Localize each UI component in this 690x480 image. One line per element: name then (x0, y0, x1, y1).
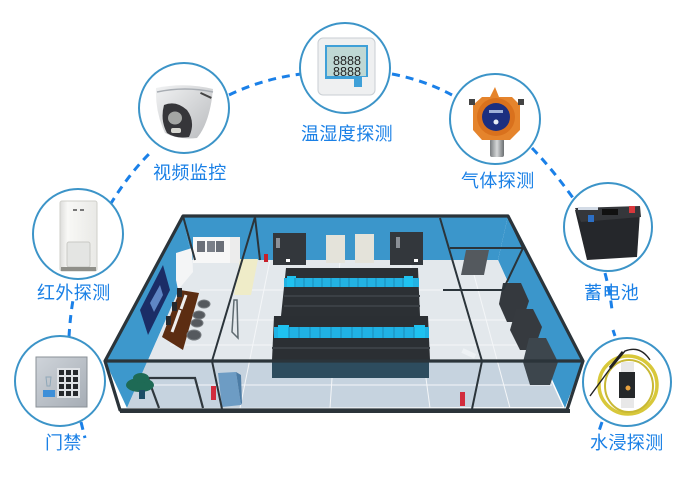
icon: dome camera (156, 85, 213, 138)
label: temperature humidity detection: 温湿度探测 (301, 124, 393, 144)
gas detection node (450, 74, 540, 191)
label: infrared detection: 红外探测 (37, 283, 111, 303)
wall screen (140, 265, 170, 335)
fire extinguishers front (211, 386, 465, 406)
back white cabinets (326, 234, 374, 263)
label: video surveillance: 视频监控 (153, 163, 227, 183)
room frame (105, 216, 583, 411)
label: water leak detection: 水浸探测 (590, 433, 664, 453)
icon: temperature humidity meter: 8888 (333, 64, 361, 79)
label: door access: 门禁 (45, 433, 82, 453)
icon: water leak sensor (590, 349, 657, 414)
brown console desk (162, 288, 199, 350)
entrance door (148, 378, 203, 408)
icon: battery (575, 206, 641, 260)
battery node (564, 183, 652, 303)
door access node (15, 336, 105, 453)
icon: infrared sensor (60, 201, 97, 271)
potted plant (126, 373, 154, 399)
server rack row 1 (281, 268, 420, 316)
label: gas detection: 气体探测 (461, 171, 535, 191)
icon: door keypad (36, 357, 87, 407)
white display cabinets (193, 237, 240, 263)
icon: gas detector (469, 87, 524, 157)
icon: temperature humidity meter: 8888 (333, 53, 361, 68)
water leak node (583, 338, 671, 453)
label: battery: 蓄电池 (584, 283, 639, 303)
beige cabinet (234, 259, 258, 295)
back wall (183, 216, 508, 260)
white indicator (461, 348, 476, 359)
white side rack (176, 248, 193, 290)
fire extinguisher back (264, 254, 268, 262)
infrared node (33, 189, 123, 303)
left wall (105, 216, 192, 408)
back dark cabinet right (390, 232, 423, 265)
rear gray cabinet (461, 250, 489, 275)
temperature and humidity node (300, 23, 393, 144)
floor (127, 260, 563, 408)
server room 3D floor plan (105, 216, 583, 411)
blue cabinet (218, 372, 242, 407)
connecting dashed arc (69, 74, 615, 438)
office chairs (187, 300, 210, 340)
dark cabinets right side (499, 283, 558, 385)
icon: temperature humidity meter (318, 38, 375, 95)
screen content (150, 285, 163, 312)
glass door (232, 300, 238, 338)
video surveillance node (139, 63, 229, 183)
back dark cabinet left (273, 233, 306, 265)
server rack row 2 (272, 316, 430, 378)
right wall (498, 216, 583, 408)
